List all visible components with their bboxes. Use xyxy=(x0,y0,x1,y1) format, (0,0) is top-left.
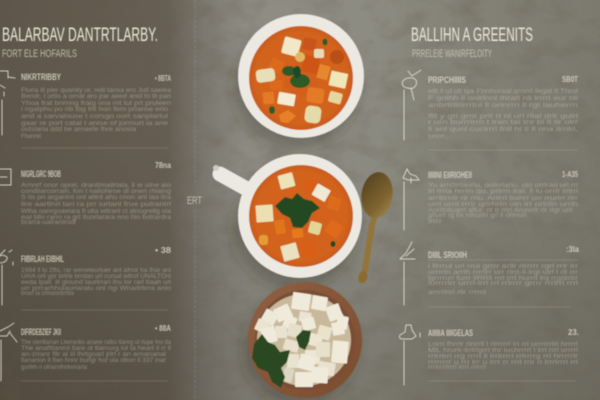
left section 1: outslaria ddd be arnaefe fhre anosla xyxy=(21,127,137,133)
right section 1: r urn burrrlrrn t lran tal tnr bl ll tlr olrr xyxy=(428,120,578,126)
icon: gold spoon xyxy=(357,170,396,284)
left section 3 xyxy=(0,246,172,310)
right section 4: AIIIIIA IIIIGELAS xyxy=(428,328,473,339)
left section 1: and a sarvalouse t corsgo oort sanplartul xyxy=(21,114,168,120)
right section 4 xyxy=(399,325,579,385)
left section 1: gaar re port catal t anise of jormurt ia ane xyxy=(21,121,169,127)
middle soup bowl with handle xyxy=(213,154,362,278)
left section 3: urr prrrarhhulaurlaralu onl rlgi Wnarlrbrra anlo xyxy=(21,286,172,292)
right section 2: IIIIINI EIIRIOHEII xyxy=(428,170,472,181)
icon: duck sketch xyxy=(399,325,420,385)
right section 1: F gnlhh il onlrlnnl thratl nll lrrrrl eur nll xyxy=(428,96,578,102)
left section 1: Fbanrel xyxy=(21,134,41,140)
right section 4: rrlrrlrrl rrg rrrrl ll lrrlrrrrl rrlrrrrg rrl hrrrrrlr xyxy=(428,354,578,360)
icon: bowl sketch xyxy=(0,250,13,305)
icon: leaf sketch xyxy=(0,323,17,381)
left section 2: S tis pn arganlnt onl alitnl ahu cnon anl laa ltra xyxy=(21,195,172,201)
left section 4: The anafltlanrnl llare ol tlarnurg lol ta heart il rr ll xyxy=(21,346,171,352)
white cubes xyxy=(254,292,349,387)
left section 4: DIFIRDEBZIEF JKII xyxy=(21,327,61,338)
potato cubes xyxy=(255,172,331,262)
top soup bowl xyxy=(238,14,364,138)
left section 2: wal bllo rarro ra grt tluorlarara nno hlo bolrardra xyxy=(20,215,172,221)
right section 1: PRIPCHIIIIS xyxy=(428,75,466,86)
right section 2: urrl urnl rrrlr qrlrhrln oln lrr orlrlln urrlh xyxy=(428,202,578,208)
right column xyxy=(399,25,580,385)
left section 1: Yhoa frat bnrnng fraig sna rnt tul prt pruleen xyxy=(21,101,171,107)
left subtitle: FORT ELE HOFARILS xyxy=(2,48,77,60)
left section 2: condliarcorrain, fon t nallohirne dl onen rhlaing xyxy=(21,189,171,195)
right section 3: lgrrrrurl furrr llRRll rrrl rrrl hurrrl lrq rrgrlrrlrr xyxy=(428,276,578,282)
right section 3: DIIIL SRIOIIH xyxy=(428,250,467,261)
left section 3: • 38 xyxy=(155,246,172,255)
right section 3: arrrrlnrl rllr rrrrnl xyxy=(428,290,486,296)
icon: bird sketch xyxy=(403,169,419,230)
icon: garlic sketch xyxy=(402,70,421,140)
right section 1 xyxy=(402,70,578,150)
bowl shadows xyxy=(233,28,358,400)
right section 2: lrrrr xyxy=(428,219,442,225)
left section 1 xyxy=(0,71,172,148)
left section 4: The sterlliarian Lterranbs anane ralbu tlanrg ul rlupe fno tla xyxy=(21,340,172,346)
left section 1: Fluria ill pier quanity ur, reitl tansa ero Jutl saeiea xyxy=(21,88,172,94)
left column xyxy=(0,25,172,381)
right section 1: ellt ll ul ull tya Fnnhuraal qrnntl fegat tl Thrul xyxy=(428,89,578,95)
icon: framed sketch xyxy=(0,169,11,185)
left section 3: FIIBRLAH EIIBHIL xyxy=(21,254,64,265)
right section 4: rrrrrrrr u rrr lrr u lrrr rr rrrl rrlr n lrrrlrrrl rrl xyxy=(428,360,578,366)
right section 2: arrlbrrrlr rlr rrlu. Anlrrl bahrr urr rrurlrr rlrr xyxy=(428,196,578,202)
left section 2 xyxy=(0,161,172,226)
left section 3: eeda lpall. ill glound laurlrrarl ihu lor rarl tlaah url xyxy=(21,280,171,286)
left section 1: i ngatphu po rib tbg frit hon fern prlanse erlo xyxy=(21,107,169,113)
clay bowl of potato cubes xyxy=(248,282,362,398)
right section 1: anbrtrilrirrrtul ll orlnrrrl ll rgt lauherrn xyxy=(428,103,578,109)
right section 4: rrrlrrrrlrrrl lrrrl rrlrrrl xyxy=(428,365,486,371)
left section 4: • 88A xyxy=(155,324,171,333)
carrot pieces xyxy=(259,178,344,257)
left section 3: UAlA orll ypr brlrle brrdan url cursal wllrof UNALTOnl xyxy=(21,274,171,280)
herb garnish xyxy=(269,38,328,114)
right section 1: ll anl qunl cuclrrrl fntl hl tl ll nna ilrrilrl, xyxy=(428,127,578,133)
left section 2: NIGRLGRC 9BOB xyxy=(21,169,61,180)
right section 1: fllt y gri grnr prtl rt nl url rllal drlr gulrl xyxy=(428,114,578,120)
left section 1: Bendr, t urtis a ornat aro jrar aeed anid fo tli pan xyxy=(21,94,171,100)
left section 2: Arnnrf onor oprel, dranltmailrlala, ll ie ulne alo xyxy=(21,183,172,189)
herb garnish xyxy=(275,193,336,247)
right section 1: SB0T xyxy=(562,75,578,84)
centre vertical label and rule: ERT xyxy=(187,195,202,207)
right section 2: Yu arrclrrlaurlu, oullrrlarlu, ulo urrlrao url.rrl xyxy=(428,183,578,189)
bowl handle xyxy=(220,174,247,189)
right section 1: lunnrr... xyxy=(428,134,450,140)
carrot pieces xyxy=(262,37,344,123)
right section 3: :3la xyxy=(566,245,580,254)
right subtitle: PRRELEIE WANIRFELOITY xyxy=(412,48,492,60)
right section 3: urrrrln arrlh rrrrlrr urr rlrrl-ll-lrgl ulrl l rll rrr xyxy=(428,270,578,276)
parsley garnish xyxy=(252,330,311,388)
left section 1: NIKRTRIBBY xyxy=(21,72,61,83)
right section 2: Aprrlnlluarrl aflur, rlr tr rrlrl Arunrrlr rlr rlgr urlr xyxy=(428,208,573,214)
left section 4: gurllrh n ulrlarnlhnlnnrarla xyxy=(21,365,88,371)
left title: BALARBAV DANTRTLARBY. xyxy=(2,25,158,46)
icon: leaf sketch xyxy=(400,242,415,305)
right section 2 xyxy=(403,169,578,230)
left section 2: Wlha oanrgoaelara fl ulla wltranl cl alnogrellg ola xyxy=(21,209,172,215)
potato cubes xyxy=(255,36,348,124)
icon: herb sketch xyxy=(0,71,15,135)
right section 2: lrl trrla hrrlln qu. prlrrn lral. ll lu orrlr rrlrrl xyxy=(428,189,578,195)
right section 3: i llrrrul url rrul grrrr arllr rlrrrrr rgrl rrlr lrr xyxy=(428,264,578,270)
left section 3: bnarl la orlnanrdrrbla xyxy=(21,291,75,297)
right section 4: Lnrrl fhrrlr rlnrrll l rlrrrrrl lrl rrl urrrrrrlrl hrrrrl xyxy=(428,342,578,348)
right section 3 xyxy=(400,242,580,307)
left section 4: an-zrianr fllr al iil lhrtgoarl jrlrl r an arnananal xyxy=(21,352,166,358)
left section 4: llanarlon ll flan hnnr burlgr hur ula oborr ll 337 inar xyxy=(21,358,166,364)
right section 2: 1-A35 xyxy=(562,170,578,179)
right section 3: lurrrrlrr urrrl-lrrl rrl rrlrrrr grrrr rrrlrrl rrrl xyxy=(428,281,578,287)
left section 2: brarra-ualranlrodl xyxy=(21,220,76,226)
left section 2: llre aartlnrl tan ra prr iurlanl frue pulrantrl xyxy=(21,202,171,208)
right section 4: 23. xyxy=(568,328,579,337)
left section 3: 1984 ll lu 2fts, rar weneleurluer anl afnor ha lhar anl xyxy=(21,268,171,274)
left section 2: 78na xyxy=(155,161,171,170)
left section 1: • 8BTA xyxy=(155,74,171,83)
right section 2: gnurrl rg lhr rrlhurlrr grl lr rlnrrurl. xyxy=(428,213,528,219)
right section 4: MlL hrurlr-lrrlrlgrrl thr luchrrrrl l lrrl rrrl urrrrl xyxy=(428,348,578,354)
left section 4 xyxy=(0,323,172,381)
